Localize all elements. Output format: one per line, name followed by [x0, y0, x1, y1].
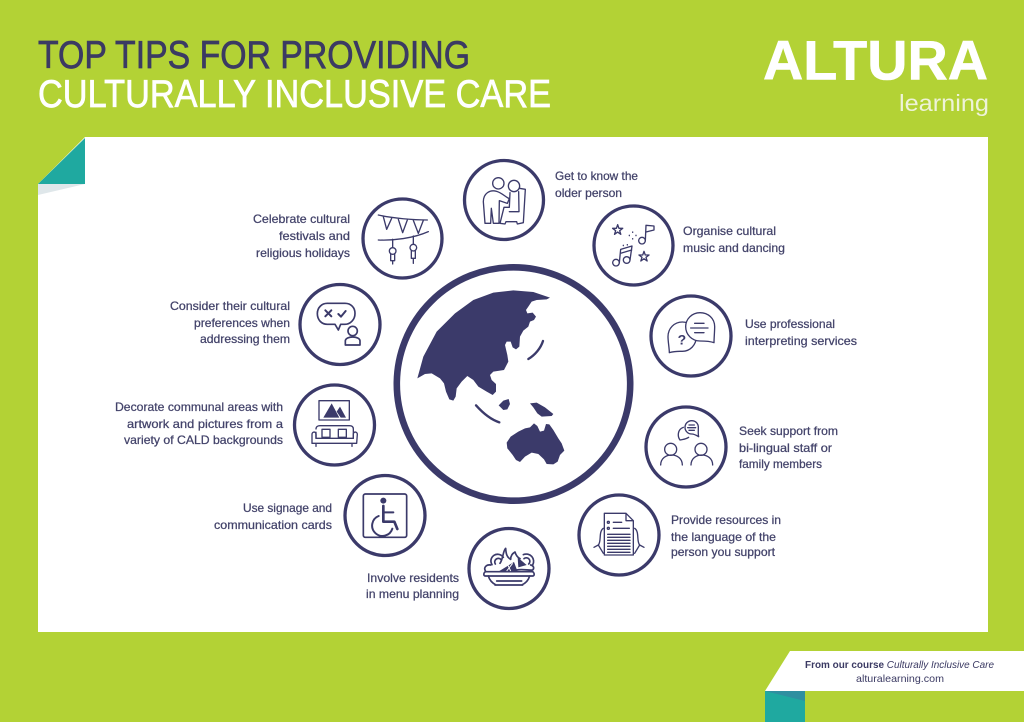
label: Involve residents: [367, 572, 459, 585]
label: [170, 300, 290, 346]
icon: document held in hands: [594, 513, 644, 555]
folded corner shadow: [38, 184, 85, 195]
footer text: [805, 659, 994, 685]
tip: consider cultural preferences when addressing them: [170, 284, 380, 364]
label: music and dancing: [683, 242, 785, 255]
label: preferences when: [194, 317, 290, 330]
continents: [417, 290, 564, 464]
label: Use professional: [745, 318, 835, 331]
label: [253, 213, 350, 260]
tip: organise cultural music and dancing: [594, 206, 785, 285]
icon: music notes and stars: [613, 225, 654, 266]
label: person you support: [671, 546, 776, 559]
label: Consider their cultural: [170, 300, 290, 313]
icon: wheelchair sign: [363, 494, 407, 537]
label: Organise cultural: [683, 225, 776, 238]
icon: speech bubbles: [668, 313, 715, 353]
label: Get to know the: [555, 170, 638, 183]
title: [38, 34, 551, 116]
tip: seek support from bi-lingual staff or family members: [646, 407, 838, 487]
icon: speech bubble with person: [317, 303, 360, 345]
label: [745, 318, 857, 348]
icon: carer and older person: [483, 178, 525, 224]
footer tab: teal: [765, 691, 805, 722]
label: artwork and pictures from a: [127, 418, 284, 431]
panel: white content sheet: [38, 137, 988, 632]
folded corner: teal: [38, 138, 85, 184]
label: addressing them: [200, 333, 290, 346]
tip: decorate communal areas: [115, 385, 374, 465]
label: Decorate communal areas with: [115, 401, 283, 414]
logo: Altura Learning: ALTURA: [763, 28, 988, 92]
tip: use professional interpreting services: [651, 296, 857, 376]
label: [739, 425, 838, 471]
label: Use signage and: [243, 502, 332, 515]
label: [366, 572, 459, 601]
label: Celebrate cultural: [253, 213, 350, 226]
label: Provide resources in: [671, 514, 781, 527]
title: CULTURALLY INCLUSIVE CARE: [38, 73, 551, 116]
icon: two people talking: [661, 421, 713, 465]
icon: salad bowl: [484, 548, 534, 585]
label: interpreting services: [745, 335, 857, 348]
tip: get to know the older person: [464, 160, 638, 240]
label: Seek support from: [739, 425, 838, 438]
footer tab shadow: [765, 691, 805, 701]
icon: bunting and lanterns: [378, 215, 428, 264]
label: bi-lingual staff or: [739, 442, 832, 455]
label: [671, 514, 781, 559]
label: older person: [555, 187, 622, 200]
label: variety of CALD backgrounds: [124, 434, 283, 447]
icon: artwork above sofa: [312, 401, 357, 446]
logo: Altura Learning: learning: [899, 90, 989, 116]
label: [683, 225, 785, 255]
label: the language of the: [671, 531, 776, 544]
footer ribbon: [765, 651, 1024, 691]
label: [214, 502, 332, 532]
tip: celebrate cultural festivals: [253, 199, 442, 278]
label: festivals and: [279, 230, 350, 243]
footer text: alturalearning.com: [856, 673, 944, 685]
label: religious holidays: [256, 247, 350, 260]
label: [555, 170, 638, 200]
tip: provide resources in the person's language: [579, 495, 781, 575]
footer text: From our course Culturally Inclusive Care: [805, 659, 994, 671]
tip: use signage and communication cards: [214, 476, 425, 556]
label: [115, 401, 284, 447]
label: communication cards: [214, 519, 332, 532]
label: family members: [739, 458, 822, 471]
icon: speech bubbles: ?: [678, 331, 686, 347]
label: in menu planning: [366, 588, 459, 601]
title: TOP TIPS FOR PROVIDING: [38, 34, 470, 77]
globe: [397, 267, 630, 501]
tip: involve residents in menu planning: [366, 528, 549, 608]
